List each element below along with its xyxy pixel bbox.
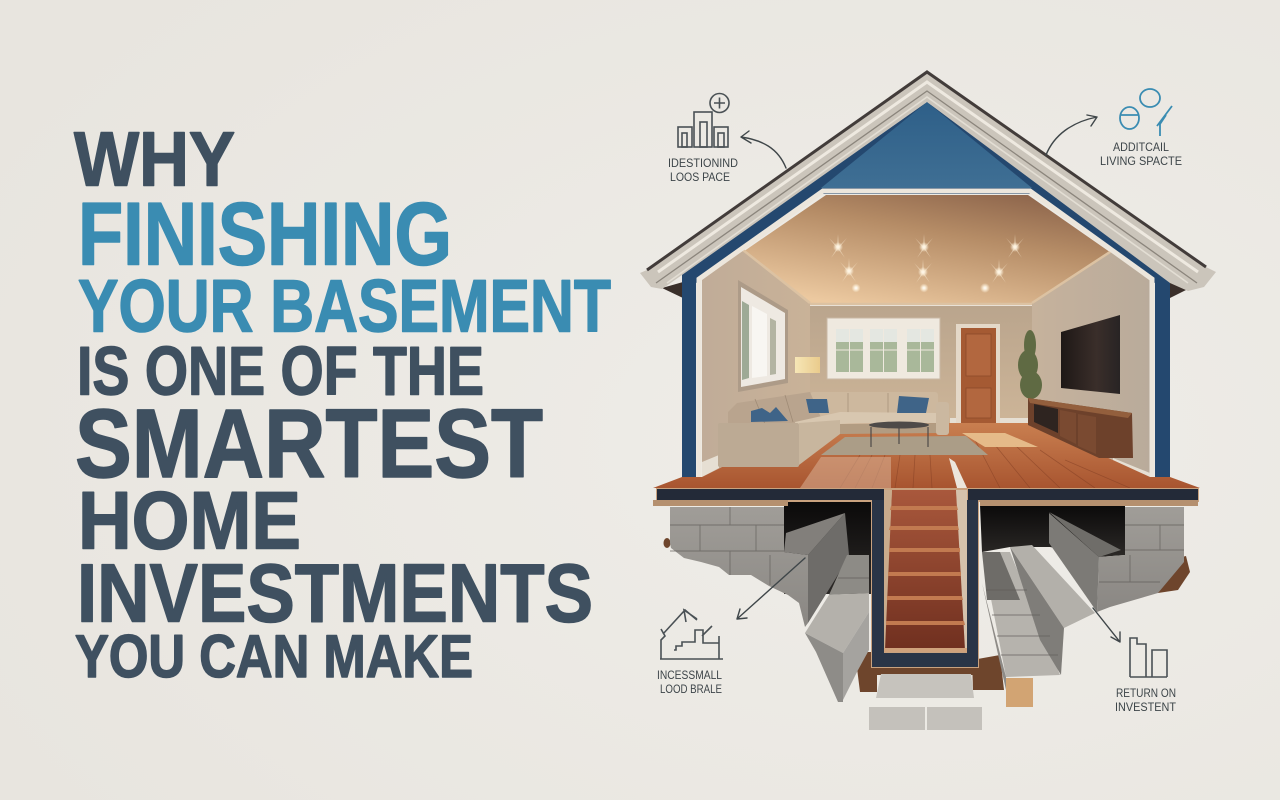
- interior room: [653, 191, 1200, 488]
- crown moulding: [743, 250, 1113, 304]
- eave shadows: [662, 282, 1190, 298]
- ceiling: [702, 195, 1150, 303]
- arrow: to top left icon: [741, 131, 786, 168]
- navy support frame: [653, 488, 1199, 668]
- label text: RETURN ON: [1116, 688, 1176, 700]
- ceiling lights: [829, 234, 1024, 293]
- right wall: [1032, 250, 1150, 477]
- television: [1061, 315, 1120, 394]
- label text: [1115, 688, 1176, 714]
- arrow: to bottom right icon: [1093, 608, 1120, 642]
- house cutaway illustration: [640, 70, 1216, 730]
- wood floor: [653, 423, 1200, 488]
- label text: ADDITCAIL: [1113, 142, 1170, 154]
- left window: [738, 280, 788, 392]
- label text: INCESSMALL: [657, 670, 723, 682]
- left block wall: [670, 507, 849, 627]
- arrow: to top right icon: [1046, 115, 1097, 155]
- label text: LOOD BRALE: [660, 684, 722, 696]
- label text: IDESTIONIND: [668, 158, 738, 170]
- roof: [640, 70, 1216, 291]
- label text: LOOS PACE: [670, 172, 730, 184]
- rug: [821, 436, 988, 455]
- callout: bottom right: [1115, 638, 1176, 714]
- callout: bottom left: [657, 610, 723, 696]
- right block wall: [1049, 507, 1184, 612]
- coffee table: [869, 422, 929, 447]
- title: [74, 116, 611, 690]
- icon: house with rising stairs: [660, 610, 723, 659]
- title: FINISHING: [78, 184, 452, 284]
- title: INVESTMENTS: [77, 546, 593, 640]
- right walkways: [982, 545, 1095, 690]
- arrow: to bottom left icon: [737, 558, 805, 619]
- pillows: [751, 396, 929, 422]
- title: WHY: [74, 116, 235, 202]
- icon: additional living space: [1120, 89, 1172, 136]
- callout: top right: [1100, 89, 1182, 168]
- icon: bar chart: [1130, 638, 1167, 677]
- concrete pavers: [869, 674, 982, 730]
- label text: [657, 670, 723, 696]
- floor lamp: [795, 357, 820, 373]
- floor opening edge: [949, 458, 967, 488]
- title: SMARTEST: [75, 389, 543, 498]
- staircase: [884, 490, 967, 652]
- back wall: [810, 306, 1032, 424]
- cardboard box: [1006, 678, 1033, 707]
- left wall: [702, 250, 810, 477]
- label text: LIVING SPACTE: [1100, 156, 1182, 168]
- blue gable and side walls: [682, 102, 1170, 477]
- baseboards: [702, 418, 1150, 477]
- label text: INVESTENT: [1115, 702, 1176, 714]
- left lower slab: [805, 555, 869, 702]
- title: YOU CAN MAKE: [75, 623, 473, 690]
- callout: top left: [668, 94, 738, 184]
- title: YOUR BASEMENT: [78, 264, 611, 348]
- sectional sofa: [718, 392, 949, 467]
- white frame trim: [699, 191, 1152, 477]
- dark voids: [784, 502, 1125, 594]
- plant: [1018, 330, 1042, 399]
- title: IS ONE OF THE: [77, 332, 484, 410]
- label text: [668, 158, 738, 184]
- icon: buildings with plus: [678, 94, 729, 147]
- soil: [664, 538, 1190, 692]
- back window: [827, 318, 940, 379]
- title: HOME: [78, 476, 301, 566]
- foundation: [653, 488, 1199, 730]
- door: [956, 324, 1000, 424]
- label text: [1100, 142, 1182, 168]
- media console: [1028, 398, 1133, 458]
